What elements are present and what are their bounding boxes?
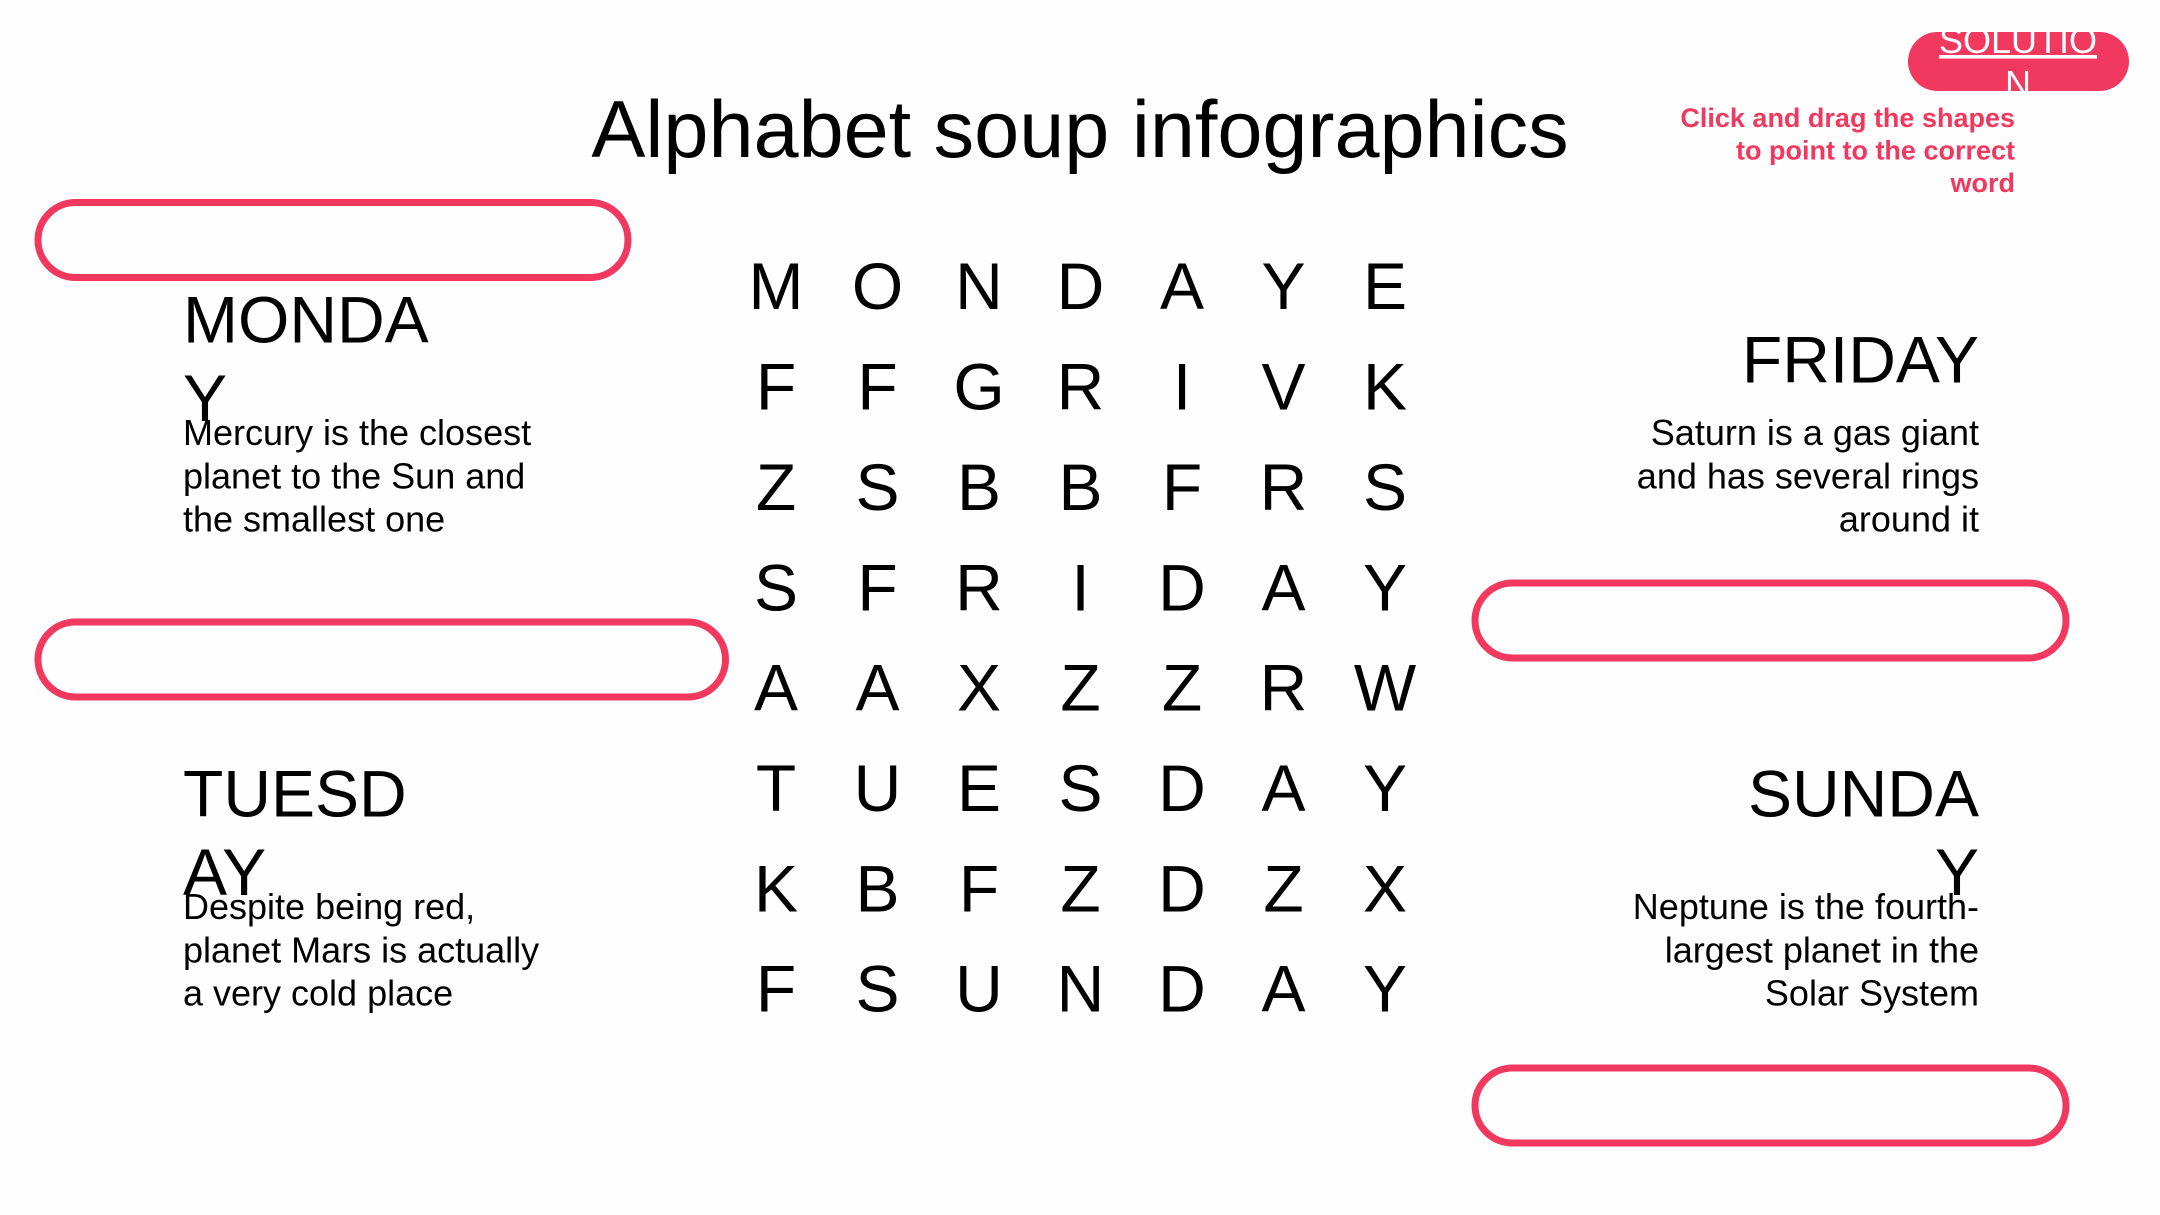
letter grid: A	[1261, 751, 1306, 825]
letter grid: I	[1173, 350, 1191, 424]
text: Saturn: and has several rings	[1637, 456, 1979, 496]
letter grid: I	[1071, 550, 1090, 624]
heading: Monday	[183, 282, 429, 435]
solution button: N	[2005, 63, 2031, 104]
letter grid: A	[1261, 550, 1306, 624]
heading: Friday: FRIDAY	[1742, 322, 1979, 396]
letter grid: Z	[756, 450, 796, 524]
text: Mercury: planet to the Sun and	[183, 456, 525, 496]
heading: Monday: Y	[183, 361, 227, 435]
letter grid: Z	[1263, 851, 1304, 925]
letter grid: N	[1057, 952, 1104, 1026]
text: Mercury: the smallest one	[183, 498, 445, 540]
letter grid: R	[1260, 450, 1307, 524]
letter grid: V	[1261, 350, 1306, 424]
panel: Sunday	[1633, 756, 1979, 1014]
heading: Sunday	[1748, 756, 1979, 909]
letter grid: A	[1160, 249, 1204, 323]
letter grid: F	[756, 952, 796, 1026]
letter grid: D	[1158, 952, 1206, 1026]
letter grid: D	[1158, 550, 1206, 624]
letter grid: X	[1363, 851, 1407, 925]
letter grid: R	[955, 550, 1003, 624]
letter grid: W	[1354, 651, 1417, 725]
letter grid: B	[1058, 450, 1103, 524]
letter grid: U	[955, 952, 1003, 1026]
letter grid: Y	[1363, 952, 1407, 1026]
letter grid: D	[1057, 249, 1104, 323]
letter grid: Z	[1060, 651, 1101, 725]
text: Neptune	[1633, 886, 1979, 1014]
letter grid: S	[1363, 450, 1407, 524]
heading: Monday: MONDA	[183, 282, 429, 356]
heading: Tuesday	[183, 756, 407, 909]
text: Mars: a very cold place	[183, 972, 453, 1014]
instruction text: Click and drag the shapes	[1680, 103, 2015, 133]
letter grid: E	[1363, 249, 1407, 323]
text: Saturn	[1637, 412, 1979, 540]
letter grid: A	[1261, 952, 1306, 1026]
letter grid: S	[855, 450, 900, 524]
letter grid: B	[855, 851, 900, 925]
letter grid: A	[855, 651, 900, 725]
heading: Tuesday: AY	[183, 835, 266, 909]
title: Alphabet soup infographics	[591, 85, 1569, 175]
letter grid: N	[955, 249, 1003, 323]
text: Mercury	[183, 412, 531, 540]
text: Saturn: around it	[1839, 498, 1979, 540]
heading: Tuesday: TUESD	[183, 756, 407, 830]
letter grid: F	[857, 550, 898, 624]
panel: Tuesday	[183, 756, 539, 1014]
letter grid: Y	[1363, 751, 1407, 825]
heading: Sunday: Y	[1935, 835, 1979, 909]
letter grid: S	[855, 952, 900, 1026]
letter grid: R	[1057, 350, 1104, 424]
letter grid: Z	[1060, 851, 1101, 925]
letter grid: Y	[1363, 550, 1407, 624]
answer pill: top left	[38, 202, 628, 278]
letter grid: E	[957, 751, 1001, 825]
text: Mars: planet Mars is actually	[183, 930, 539, 970]
letter grid: F	[1162, 450, 1202, 524]
letter grid: D	[1158, 851, 1206, 925]
panel: Friday	[1637, 322, 1979, 540]
instruction text: to point to the correct	[1736, 136, 2015, 166]
letter grid: X	[957, 651, 1001, 725]
answer pill: bottom right	[1475, 1068, 2066, 1143]
letter grid: M	[749, 249, 803, 323]
letter grid: F	[959, 851, 999, 925]
letter grid: K	[754, 851, 798, 925]
answer pill: middle right	[1475, 583, 2066, 658]
letter grid: T	[756, 751, 796, 825]
answer pill: middle left	[38, 622, 726, 697]
letter grid: D	[1158, 751, 1206, 825]
letter grid: F	[756, 350, 796, 424]
letter grid: K	[1363, 350, 1407, 424]
solution button	[1908, 32, 2129, 91]
letter grid: U	[854, 751, 901, 825]
instruction text	[1680, 103, 2015, 198]
instruction text: word	[1950, 168, 2015, 198]
panel: Monday	[183, 282, 531, 540]
letter grid: S	[1058, 751, 1103, 825]
text: Neptune: Solar System	[1765, 972, 1979, 1014]
heading: Sunday: SUNDA	[1748, 756, 1979, 830]
letter grid: G	[953, 350, 1005, 424]
text: Mercury: Mercury is the closest	[183, 412, 531, 453]
text: Mars: Despite being red,	[183, 886, 475, 927]
text: Mars	[183, 886, 539, 1014]
text: Neptune: largest planet in the	[1665, 930, 1979, 970]
letter grid: A	[754, 651, 798, 725]
solution button: SOLUTIO	[1939, 20, 2097, 61]
letter grid: Y	[1261, 249, 1306, 323]
text: Neptune: Neptune is the fourth-	[1633, 886, 1979, 927]
letter grid: B	[957, 450, 1001, 524]
text: Saturn: Saturn is a gas giant	[1651, 412, 1979, 453]
letter grid	[749, 249, 1417, 1026]
letter grid: S	[754, 550, 798, 624]
letter grid: O	[852, 249, 903, 323]
letter grid: R	[1260, 651, 1307, 725]
letter grid: Z	[1162, 651, 1202, 725]
letter grid: F	[857, 350, 898, 424]
